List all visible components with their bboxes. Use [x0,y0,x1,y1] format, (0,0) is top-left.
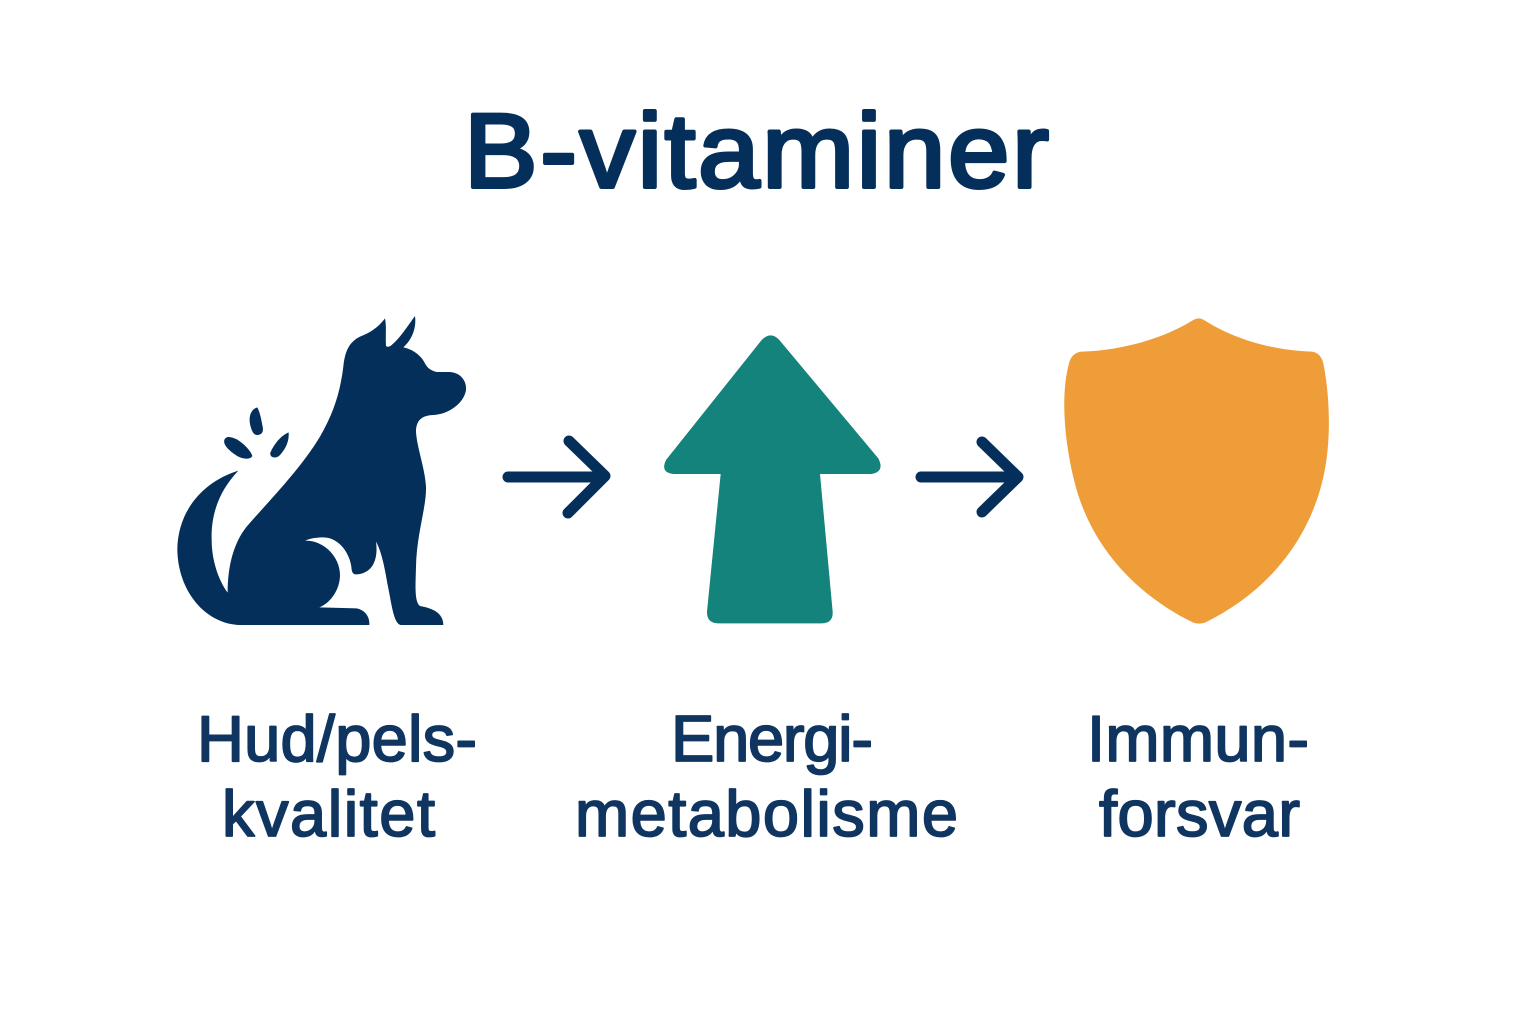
arrow: dog to energy [508,441,605,513]
icon: sparkle top [250,407,263,435]
icon: sparkle right [270,432,289,458]
label: immune defence: Immun- [1087,702,1309,775]
label: immune defence: forsvar [1099,777,1300,850]
label: skin and coat quality: kvalitet [222,777,435,850]
label: energy metabolism [575,702,958,850]
label: energy metabolism: metabolisme [575,777,958,850]
icon: orange shield [1064,318,1329,624]
label: skin and coat quality: Hud/pels- [197,702,477,775]
label: skin and coat quality [197,702,477,850]
arrow: energy to immune [921,442,1018,512]
icon: dog with skin and coat sparkles [177,316,466,625]
icon: sparkle left [224,437,252,459]
icon: teal up arrow [664,335,881,623]
title: B-vitaminer [464,92,1049,209]
label: energy metabolism: Energi- [671,702,873,775]
label: immune defence [1087,702,1309,850]
